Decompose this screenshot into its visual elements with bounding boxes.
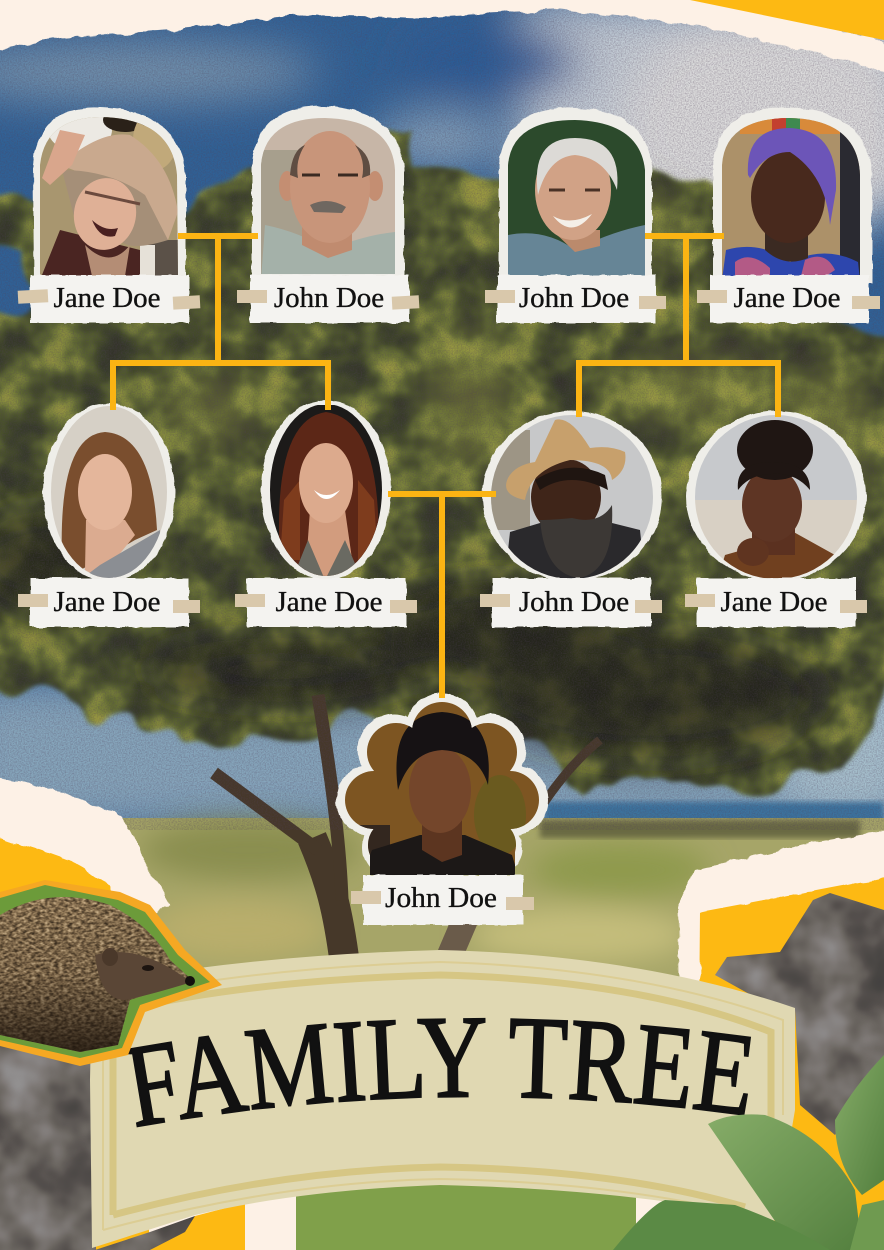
tree canopy [0,118,884,795]
portrait: John Doe child [336,693,550,878]
name label: John Doe 2: John Doe [274,282,384,314]
torn paper top edge [0,0,884,74]
rock strip over banner [95,1216,195,1250]
name label: Jane Doe 6 [235,578,417,627]
name label: Jane Doe 1 [18,275,200,323]
portrait: Jane Doe middle 1 [43,403,175,585]
name label: Jane Doe 5: Jane Doe [53,586,161,618]
horizon water [544,799,884,818]
yellow corner top right [690,0,884,40]
light upper canopy highlights [160,185,870,510]
portrait: John Doe top 3 [499,108,652,284]
torn paper left [0,775,170,925]
name label: John Doe child [351,875,534,925]
tree trunks [214,695,600,965]
torn paper right [678,828,884,1000]
sky [0,0,884,830]
title banner: FAMILY TREE [128,1018,752,1128]
name label: Jane Doe 4 [697,275,880,323]
portrait: John Doe top 2 [252,106,404,284]
yellow strip bottom left [150,1203,248,1250]
portrait: Jane Doe top 4 [713,108,872,284]
name label: John Doe 2 [237,275,419,323]
dark lower canopy shading [0,510,820,757]
name label: John Doe 3 [485,275,666,323]
name label: John Doe 3: John Doe [519,282,629,314]
icon: green leaves [613,1055,884,1250]
bottom meadow strip [296,1180,636,1250]
bushes along the horizon [540,820,860,838]
name label: Jane Doe 8: Jane Doe [720,586,828,618]
rock right [715,893,884,1135]
portrait: Jane Doe middle 2 [261,400,391,585]
meadow [122,818,884,976]
name label: Jane Doe 4: Jane Doe [733,282,841,314]
name label: Jane Doe 5 [18,578,200,627]
yellow block lower right [697,877,884,1250]
name label: Jane Doe 6: Jane Doe [275,586,383,618]
connector lines [113,236,778,698]
portrait: John Doe middle 3 [482,411,662,581]
title banner [90,950,795,1248]
name label: John Doe 7 [480,578,662,627]
portrait: Jane Doe top left [33,108,186,284]
noise grain [0,0,884,830]
rock left [0,1040,96,1250]
name label: John Doe child: John Doe [385,882,497,914]
yellow block lower left [0,835,150,1250]
name label: John Doe 7: John Doe [519,586,629,618]
name label: Jane Doe 8 [685,578,867,627]
portrait: Jane Doe middle 4 [686,411,866,585]
icon: hedgehog [0,880,222,1066]
name label: Jane Doe 1: Jane Doe [53,282,161,314]
title [134,1096,752,1127]
bottom paper [245,1180,305,1250]
